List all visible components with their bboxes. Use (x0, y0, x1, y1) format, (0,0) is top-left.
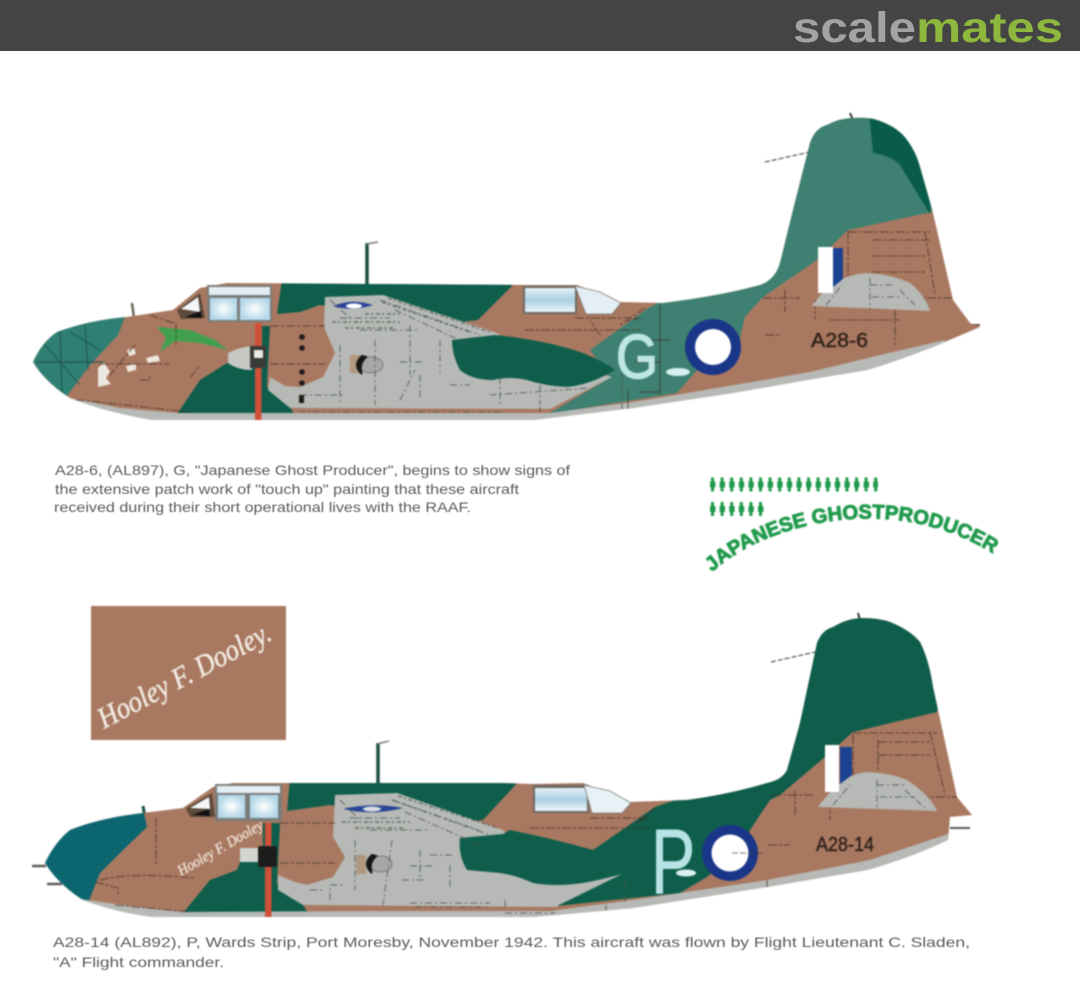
cockpit canopy (186, 784, 282, 821)
scalemates logo (793, 4, 1063, 52)
caption: A28-6: received during their short operational lives with the RAAF. (54, 499, 471, 515)
grey wing and lower side (278, 793, 622, 907)
nose art: bomb tally and name: JAPANESE GHOSTPRODUCER (705, 503, 1000, 572)
cockpit canopy (177, 285, 272, 322)
red stripe (265, 823, 272, 919)
caption: A28-14: "A" Flight commander. (53, 954, 224, 970)
dark green wing patch and rear fuselage (460, 600, 960, 906)
windscreen (177, 293, 205, 319)
dark fin tip (869, 118, 932, 214)
black engine block (258, 846, 277, 867)
panel lines (60, 230, 955, 412)
wing roundel (333, 302, 373, 309)
tail dome grey (812, 273, 930, 311)
windscreen (186, 793, 215, 817)
nose window grey (240, 848, 258, 862)
rear canopy (533, 785, 631, 813)
nose teal (32, 316, 126, 396)
bomb tally (710, 484, 878, 509)
code letter P: P (651, 809, 695, 913)
engine nacelle front (350, 355, 383, 374)
curved name (712, 519, 1040, 590)
light green tail area (550, 116, 933, 414)
roundel (685, 319, 741, 375)
nose blue-green (44, 812, 148, 902)
dark green spine (286, 782, 518, 822)
dark green chin (177, 326, 294, 414)
top panes (217, 786, 280, 793)
fuselage camouflage (32, 116, 980, 421)
dark green wing patch (452, 335, 615, 387)
header bar (0, 0, 1080, 51)
panel lines (95, 732, 960, 912)
wing roundel (343, 805, 403, 812)
flare patch (666, 368, 690, 376)
grey wing and lower side (268, 295, 612, 409)
aircraft profile: A28-14 (31, 612, 972, 918)
dark green chin (183, 823, 308, 913)
pane left (218, 795, 245, 818)
white chipped paint (98, 348, 160, 387)
aerials and probes (32, 613, 970, 884)
frame (215, 784, 282, 821)
nose art swoosh (157, 327, 228, 352)
fuselage camouflage (44, 616, 972, 918)
aerials and probes (132, 113, 980, 325)
nose art panel: signature: Hooley F. Dooley. (91, 616, 277, 736)
belly grey (71, 340, 946, 421)
dome panel lines (826, 278, 915, 310)
caption: A28-14 (53, 934, 970, 970)
tail dome grey (818, 772, 937, 811)
pane left (210, 298, 237, 320)
engine nacelle front (356, 855, 392, 874)
rear canopy (523, 286, 621, 314)
caption: A28-6: A28-6, (AL897), G, "Japanese Ghost Producer", begins to show signs of (55, 462, 570, 478)
serial number: A28-14 (816, 834, 874, 856)
nose window grey (228, 346, 252, 370)
caption: A28-14: A28-14 (AL892), P, Wards Strip, Port Moresby, November 1942. This aircraft was flown by Flight Lieutenant C. Sladen, (53, 934, 970, 950)
fin flash (825, 745, 852, 792)
belly grey (82, 834, 949, 918)
scalemates logo: scale (793, 4, 916, 52)
pane right (240, 298, 270, 320)
fin flash (818, 247, 843, 293)
serial number: A28-6 (811, 330, 868, 352)
frame (207, 285, 272, 322)
roundel (702, 825, 765, 881)
nose glazing lines (36, 325, 105, 392)
code letter G: G (616, 323, 658, 392)
scalemates logo: mates (916, 4, 1063, 52)
exhaust dots (299, 334, 305, 403)
red stripe (255, 323, 262, 421)
caption: A28-6: the extensive patch work of "touch up" painting that these aircraft (55, 481, 519, 497)
nose name: Hooley F. Dooley (174, 817, 266, 880)
nose art: bomb tally and name (705, 476, 1000, 572)
engine mount block (250, 346, 266, 368)
dark green spine (276, 282, 514, 323)
top panes (209, 287, 270, 295)
caption: A28-6 (54, 462, 570, 515)
aircraft profile: A28-6 (32, 112, 981, 421)
flare patch (676, 870, 696, 876)
dome panel lines (833, 780, 925, 808)
pane right (250, 795, 278, 818)
